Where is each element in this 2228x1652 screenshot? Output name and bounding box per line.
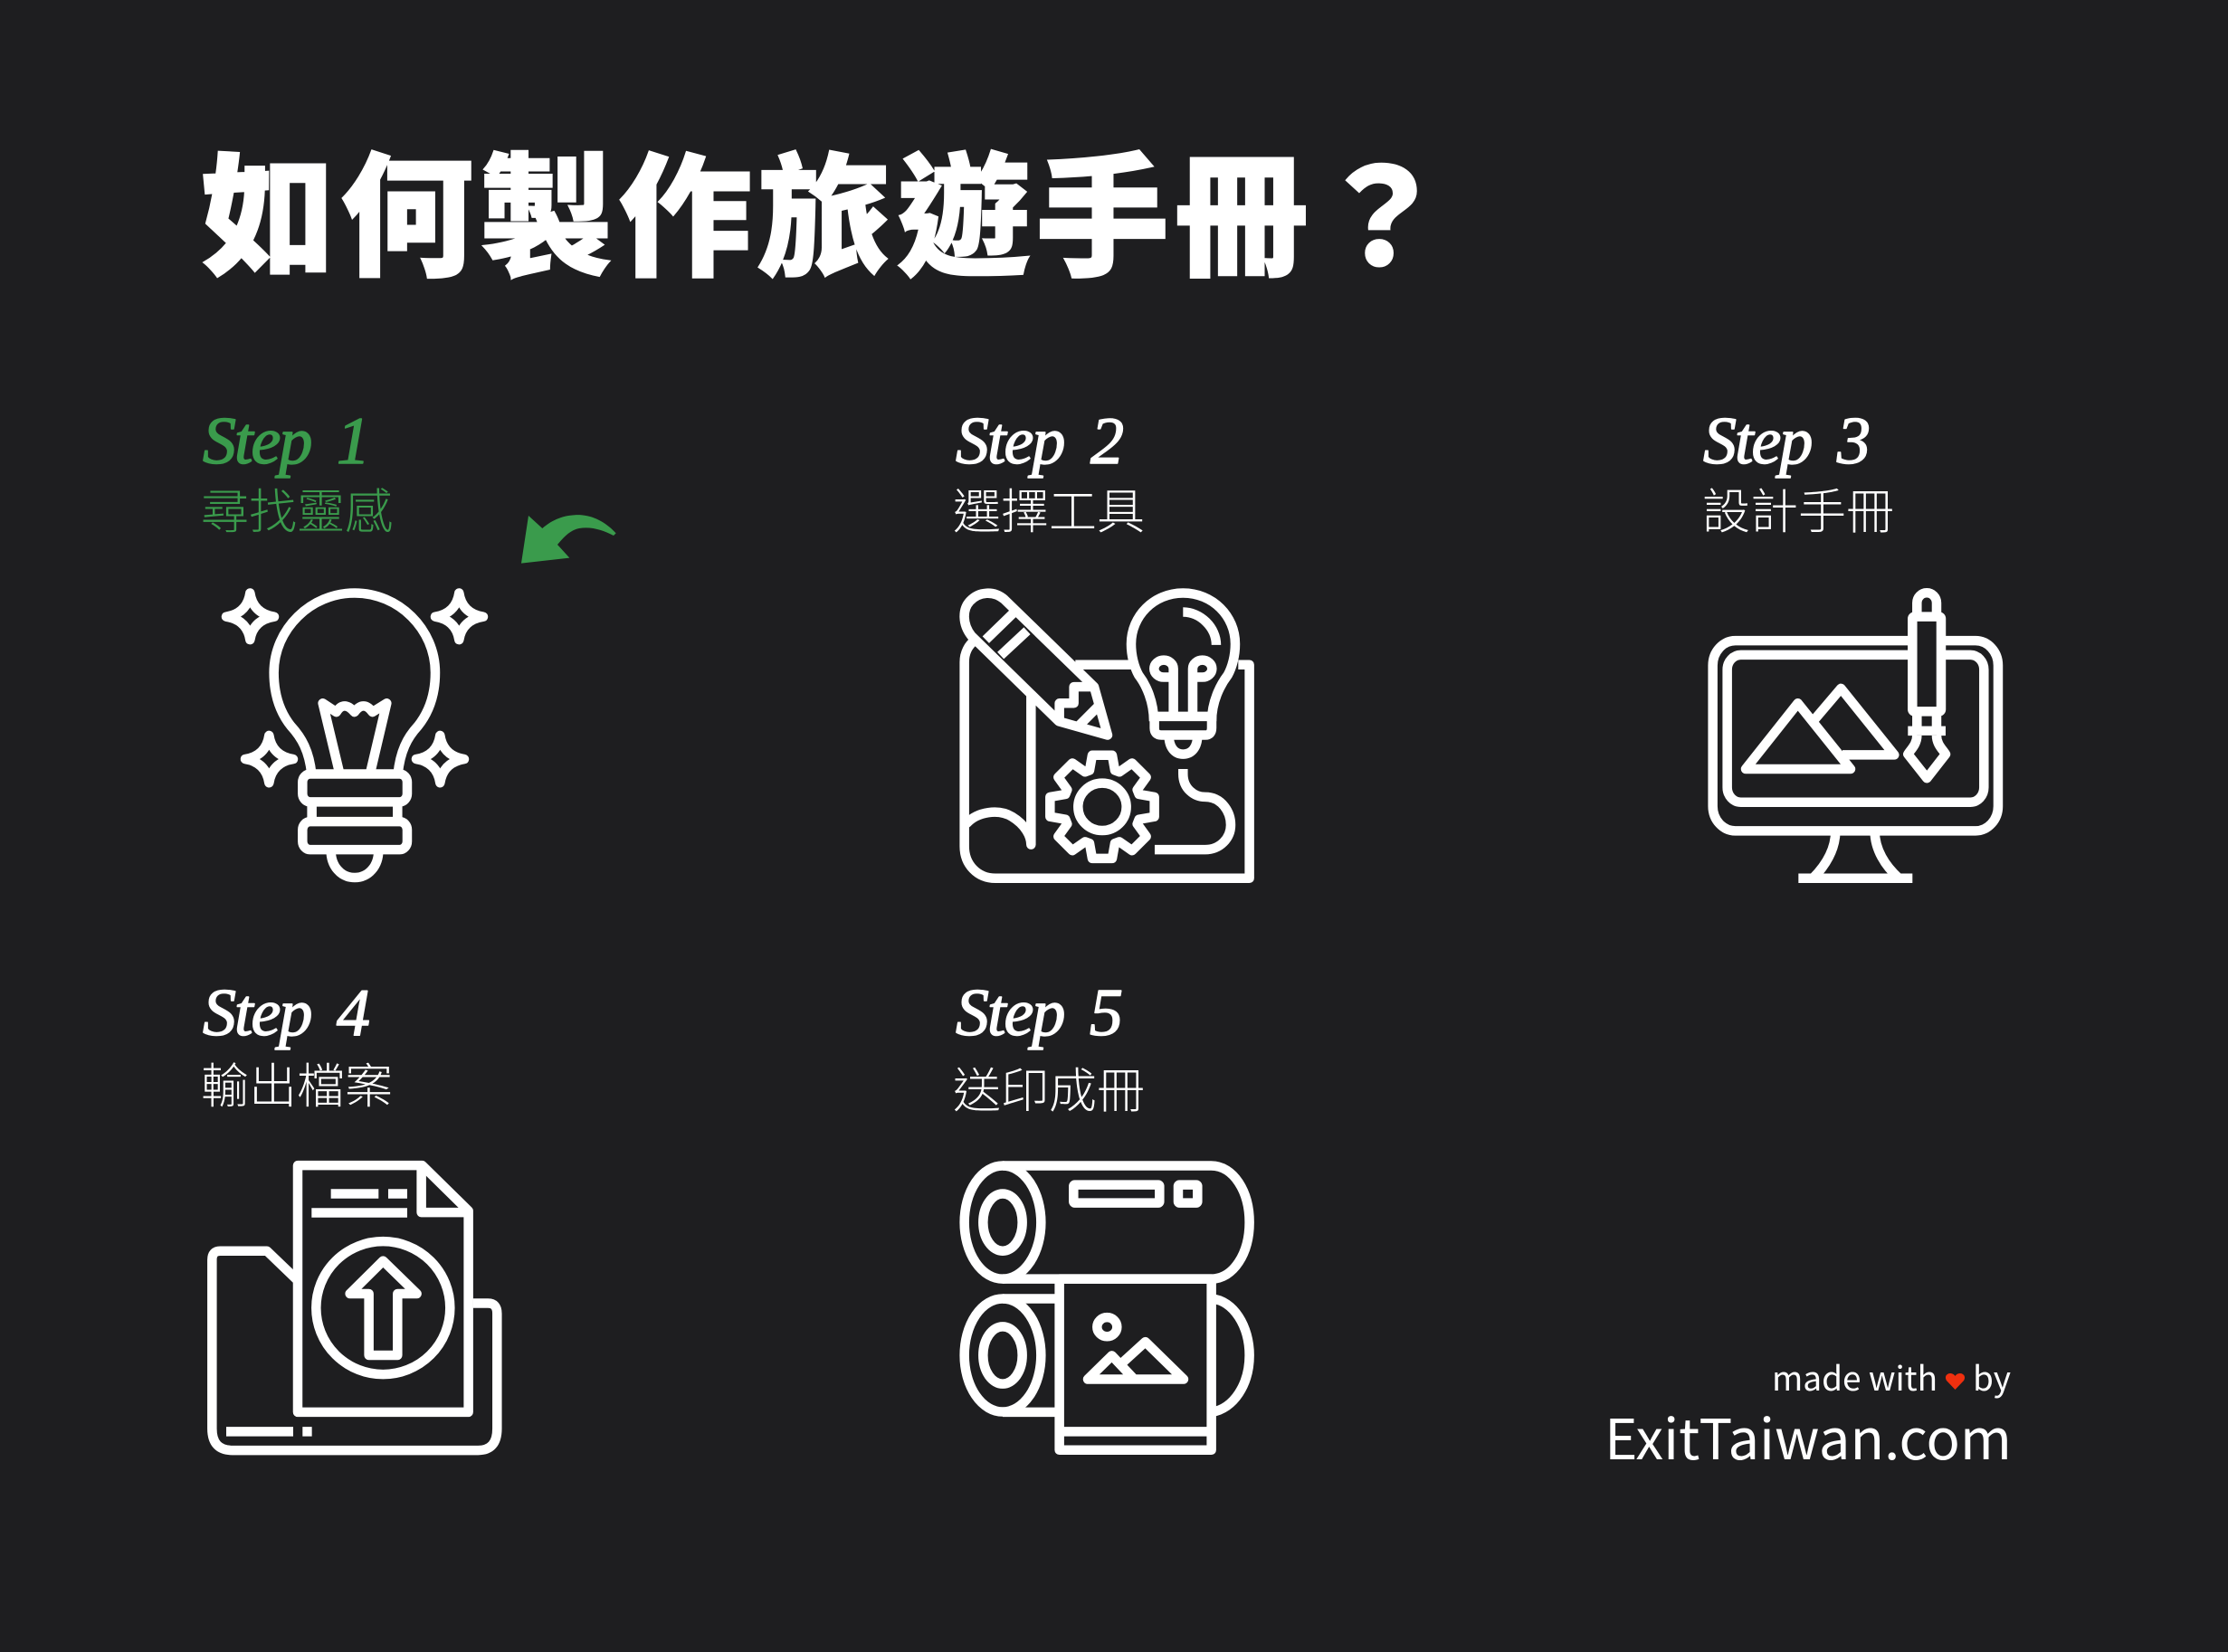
icon: light bulb xyxy=(226,593,483,878)
step 5 subtitle: 送印成冊 xyxy=(953,1065,1145,1118)
step 2 heading: 2 xyxy=(1090,404,1123,479)
step 4 heading: Step xyxy=(203,976,310,1050)
panel: step 1 xyxy=(201,404,616,878)
step 5 heading: Step xyxy=(956,976,1063,1050)
step 4 heading: 4 xyxy=(337,976,369,1050)
icon: folder with upload file xyxy=(212,1165,497,1450)
step 3 subtitle: 設計手冊 xyxy=(1702,486,1894,539)
icon: printer rolls xyxy=(965,1166,1250,1450)
step 1 heading: 1 xyxy=(337,404,368,479)
icon: monitor with pen xyxy=(1713,593,1998,878)
credit: site name: ExitTaiwan.com xyxy=(1604,1394,2012,1476)
step 1 heading: Step xyxy=(203,404,310,479)
icon: red heart xyxy=(1946,1373,1965,1390)
step 3 heading: 3 xyxy=(1836,404,1869,479)
panel: step 4 xyxy=(201,976,497,1450)
step 2 subtitle: 選擇工具 xyxy=(953,486,1145,539)
panel: step 3 xyxy=(1702,404,1998,878)
icon: blueprint with pencil, bulb and gear xyxy=(965,593,1250,878)
step 1 subtitle: 尋找靈感 xyxy=(201,486,393,539)
step 5 heading: 5 xyxy=(1090,976,1121,1050)
step 2 heading: Step xyxy=(956,404,1063,479)
credit: made with love: by xyxy=(1973,1352,2011,1400)
panel: step 2 xyxy=(953,404,1250,878)
icon: green arrow xyxy=(521,515,616,564)
step 3 heading: Step xyxy=(1703,404,1811,479)
step 4 subtitle: 輸出檔案 xyxy=(201,1060,393,1114)
panel: step 5 xyxy=(953,976,1250,1450)
title: 如何製作旅遊手冊？ xyxy=(201,145,1452,294)
credit: made with love: made with xyxy=(1772,1352,1938,1400)
credit: made with love xyxy=(1772,1352,2011,1400)
